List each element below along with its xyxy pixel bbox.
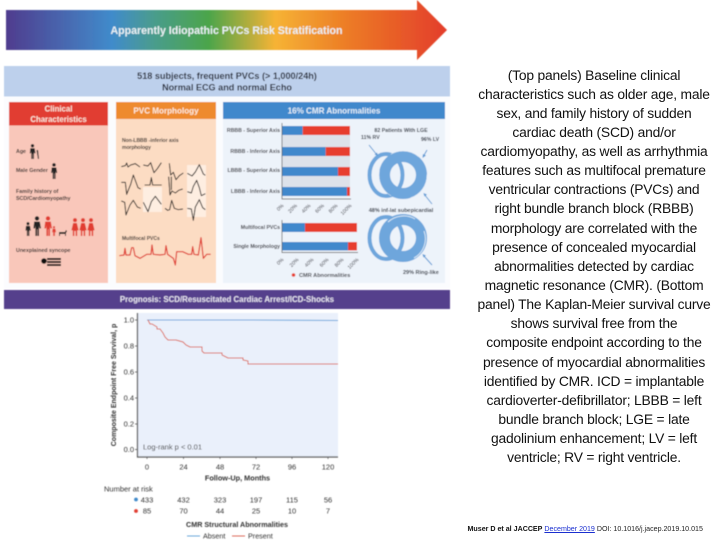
bar chart: QRS morphology: RBBB - Inferior Axis xyxy=(230,149,280,155)
curve: present xyxy=(148,320,338,364)
ECG traces grid xyxy=(121,163,205,220)
curve: absent xyxy=(147,319,338,322)
icon: male person xyxy=(51,163,57,179)
caption text block: characteristics such as older age, male xyxy=(478,86,710,102)
caption text block xyxy=(478,66,710,465)
caption text block: morphology are correlated with the xyxy=(491,220,697,236)
number at risk table: 197 xyxy=(250,496,262,504)
label: inferior axis morphology: morphology xyxy=(122,145,151,151)
x axis labels xyxy=(145,462,334,472)
cohort banner: 518 subjects, frequent PVCs (> 1,000/24h) xyxy=(137,71,317,81)
chart legend xyxy=(186,520,288,540)
heart diagram: LGE distribution: 96% LV xyxy=(421,137,440,143)
bar chart: QRS morphology: RBBB - Superior Axis xyxy=(227,128,280,134)
Kaplan-Meier chart xyxy=(111,313,338,482)
y axis ticks and labels: 0.6 xyxy=(124,368,134,376)
x axis labels: 72 xyxy=(252,462,260,472)
caption text block: cardiac death (SCD) and/or xyxy=(512,124,676,140)
number at risk table: 323 xyxy=(214,496,226,504)
y axis ticks and labels: 0.2 xyxy=(124,420,134,428)
bar chart: PVC focality: 80% xyxy=(334,257,346,269)
bar chart: PVC focality: Single Morphology xyxy=(233,244,280,250)
icon: person lying down xyxy=(41,258,61,266)
heading: clinical characteristics: Clinical xyxy=(45,104,72,114)
caption text block: composite endpoint according to the xyxy=(486,334,702,350)
x axis title: Follow-Up, Months xyxy=(205,474,270,482)
x axis labels: 96 xyxy=(288,462,296,472)
bar chart: PVC focality: 60% xyxy=(319,257,331,269)
icon: family group xyxy=(25,216,95,236)
bar chart: QRS morphology: 20% xyxy=(287,203,299,215)
caption text block: presence of myocardial abnormalities xyxy=(483,354,705,370)
caption text block: shows survival free from the xyxy=(511,315,677,331)
caption text block: ventricle; RV = right ventricle. xyxy=(507,449,681,465)
bar chart: QRS morphology: 0% xyxy=(276,203,286,213)
number at risk table: 7 xyxy=(326,506,330,516)
bar chart: QRS morphology: 40% xyxy=(301,203,313,215)
caption text block: features such as multifocal premature xyxy=(482,162,706,178)
cohort banner xyxy=(4,66,450,96)
title arrow: Apparently Idiopathic PVCs Risk Stratification xyxy=(111,25,342,37)
chart legend: CMR Structural Abnormalities xyxy=(186,520,288,529)
number at risk table: 432 xyxy=(177,496,190,504)
prognosis banner xyxy=(4,290,450,309)
caption text block: cardioverter-defibrillator; LBBB = left xyxy=(487,392,701,408)
bar chart: PVC focality: 0% xyxy=(276,257,286,267)
y axis ticks and labels: 0.4 xyxy=(124,394,134,402)
cohort banner: Normal ECG and normal Echo xyxy=(162,82,292,92)
heart diagram: LGE distribution: 82 Patients With LGE xyxy=(374,128,428,134)
bar chart: QRS morphology: LBBB - Inferior Axis xyxy=(231,189,280,195)
x axis labels: 48 xyxy=(216,462,224,472)
y axis title: Composite Endpoint Free Survival, p xyxy=(111,324,118,446)
heart diagram: LGE distribution xyxy=(361,128,440,214)
number at risk table: 25 xyxy=(252,506,260,516)
bar chart: QRS morphology: 100% xyxy=(340,203,354,217)
heading: PVC morphology: PVC Morphology xyxy=(133,106,199,116)
x axis labels: 24 xyxy=(179,462,188,472)
y axis ticks and labels: 1.0 xyxy=(124,316,134,324)
clinical factor labels: Male Gender xyxy=(16,168,48,174)
heart diagram: LGE distribution: 11% RV xyxy=(361,135,380,141)
panel: CMR abnormalities xyxy=(223,102,445,283)
caption text block: presence of concealed myocardial xyxy=(492,239,696,255)
clinical factor labels: Family history of xyxy=(16,189,59,195)
heart diagram: ring-like LGE: 29% Ring-like xyxy=(403,270,439,276)
log-rank annotation: Log-rank p < 0.01 xyxy=(143,442,202,452)
number at risk table: 115 xyxy=(286,496,298,504)
number at risk table xyxy=(104,484,332,516)
heart diagram: ring-like LGE xyxy=(370,216,439,276)
number at risk table: 70 xyxy=(179,506,188,516)
multifocal ECG strip xyxy=(119,238,211,265)
caption text block: abnormalities detected by cardiac xyxy=(494,258,694,274)
bar chart: QRS morphology: 80% xyxy=(328,203,340,215)
title arrow xyxy=(6,0,447,60)
caption text block: cardiomyopathy, as well as arrhythmia xyxy=(480,143,708,159)
y axis ticks and labels xyxy=(124,316,134,454)
label: inferior axis morphology: Non-LBBB -inferior axis xyxy=(122,138,179,144)
bar chart: PVC focality: 20% xyxy=(289,257,301,269)
bar chart: PVC focality: 40% xyxy=(304,257,316,269)
bar chart: PVC focality: 100% xyxy=(347,257,361,271)
pale ECG highlights xyxy=(143,187,162,212)
heading: clinical characteristics: Characteristics xyxy=(30,115,87,124)
caption text block: gadolinium enhancement; LV = left xyxy=(491,430,697,446)
caption text block: identified by CMR. ICD = implantable xyxy=(484,373,704,389)
prognosis banner: Prognosis: SCD/Resuscitated Cardiac Arrest/ICD-Shocks xyxy=(120,295,335,304)
caption text block: bundle branch block; LGE = late xyxy=(498,411,690,427)
clinical factor labels: SCD/Cardiomyopathy xyxy=(16,196,71,202)
y axis ticks and labels: 0.0 xyxy=(124,445,134,454)
label: multifocal PVCs: Multifocal PVCs xyxy=(122,236,160,242)
caption text block: magnetic resonance (CMR). (Bottom xyxy=(485,277,703,293)
clinical factor labels xyxy=(16,149,71,254)
bar chart: QRS morphology: 60% xyxy=(314,203,326,215)
x axis labels: 120 xyxy=(322,462,334,472)
panel: PVC morphology xyxy=(116,102,216,283)
x axis labels: 0 xyxy=(145,462,149,472)
number at risk table: 10 xyxy=(288,506,296,516)
icon: elderly person xyxy=(30,144,39,159)
caption text block: panel) The Kaplan-Meier survival curve xyxy=(478,296,710,312)
citation: Muser D et al JACCEP December 2019 DOI: 10.1016/j.jacep.2019.10.015 xyxy=(468,524,703,532)
panel: clinical characteristics xyxy=(9,102,108,283)
heading: CMR abnormalities: 16% CMR Abnormalities xyxy=(288,106,381,116)
bar chart: PVC focality: Multifocal PVCs xyxy=(241,225,280,231)
bar chart: PVC focality xyxy=(233,220,361,279)
number at risk table: 56 xyxy=(324,496,332,504)
clinical factor labels: Unexplained syncope xyxy=(16,248,71,254)
caption text block: right bundle branch block (RBBB) xyxy=(494,200,694,216)
bar chart: QRS morphology: LBBB - Superior Axis xyxy=(227,168,280,174)
number at risk table: 85 xyxy=(143,506,151,516)
number at risk table: Number at risk xyxy=(104,484,153,494)
heart diagram: LGE distribution: 48% inf-lat subepicardial xyxy=(369,208,434,214)
caption text block: ventricular contractions (PVCs) and xyxy=(489,181,699,197)
caption text block: sex, and family history of sudden xyxy=(496,105,692,121)
number at risk table: 433 xyxy=(141,496,153,504)
number at risk table: 44 xyxy=(216,506,224,516)
legend: CMR abnormalities: CMR Abnormalities xyxy=(299,273,350,279)
caption text block: (Top panels) Baseline clinical xyxy=(508,66,680,82)
y axis ticks and labels: 0.8 xyxy=(124,342,134,350)
bar chart: QRS morphology xyxy=(227,123,354,217)
clinical factor labels: Age xyxy=(16,149,26,155)
top panels background xyxy=(4,97,450,288)
